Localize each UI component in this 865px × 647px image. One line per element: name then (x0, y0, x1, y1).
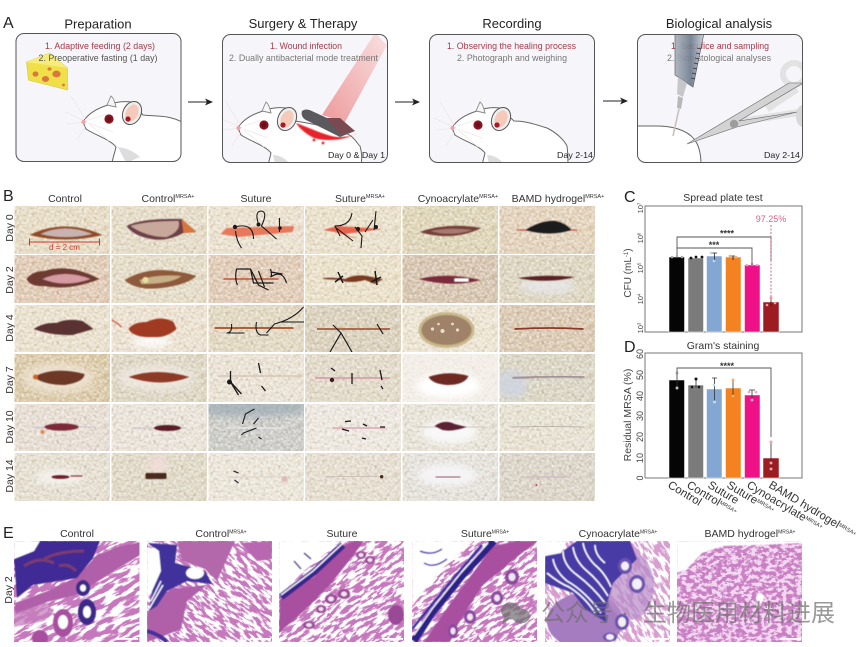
significance brackets (677, 237, 771, 265)
photo: control day 7 (14, 354, 110, 402)
panel letter D: D (624, 339, 636, 356)
photo: BAMD hydrogel day 14 (500, 453, 595, 501)
photo: BAMD hydrogel day 2 (500, 255, 595, 303)
tick labels: 50 (635, 370, 645, 380)
category labels: MRSA+ (718, 500, 738, 515)
text: analysis steps: 2. Biohistological analyses (667, 53, 771, 63)
axis label: Residual MRSA (%) (622, 369, 634, 461)
photo: cynoacrylate day 0 (402, 206, 498, 254)
panel: preparation (16, 33, 182, 162)
photo: control day 10 (14, 404, 110, 451)
category labels: Suture (724, 479, 760, 507)
row labels: days: Day 4 (4, 314, 16, 342)
photo: suture day 7 (208, 354, 304, 402)
axis label: -1 (624, 251, 630, 257)
icon: mouse (220, 102, 362, 168)
histology: cynoacrylate (545, 541, 671, 647)
chart: gram's staining (622, 340, 858, 541)
column headings: wound photos: MRSA+ (366, 194, 385, 200)
photo: cynoacrylate day 4 (402, 305, 498, 352)
column headings: histology: Control (60, 528, 94, 540)
tick labels: 20 (635, 432, 645, 442)
text: surgery steps (229, 41, 378, 63)
column headings: histology: MRSA+ (492, 530, 509, 536)
icon: syringe (673, 33, 704, 136)
tick labels: 30 (635, 411, 645, 421)
photo: suture MRSA day 14 (305, 453, 401, 501)
photo: cynoacrylate day 14 (402, 453, 498, 501)
histology: control (14, 541, 140, 642)
text: day label: Day 2-14 (557, 150, 593, 160)
column headings: wound photos: MRSA+ (175, 194, 194, 200)
chart: spread plate test: *** (709, 240, 720, 250)
column headings: histology: Cynoacrylate (579, 528, 640, 540)
category labels (665, 479, 858, 541)
text: preparation steps: 1. Adaptive feeding (2 days) (45, 41, 155, 51)
column headings: wound photos: Suture (335, 193, 366, 205)
photo: cynoacrylate day 7 (402, 354, 498, 402)
column headings: wound photos: BAMD hydrogel (512, 193, 585, 205)
chart: spread plate test: **** (720, 228, 734, 238)
panel letter E: E (3, 525, 14, 542)
row labels: days: Day 2 (4, 266, 16, 294)
photo: suture MRSA day 2 (305, 255, 401, 303)
category labels: Control (684, 479, 722, 509)
photo: BAMD hydrogel day 10 (500, 404, 595, 451)
column headings: wound photos: MRSA+ (479, 194, 498, 200)
text: recording steps: 2. Photograph and weighing (457, 53, 567, 63)
icon: laser beam (322, 33, 387, 122)
histology: suture (279, 541, 404, 642)
photo: suture day 2 (208, 255, 304, 303)
panel: recording (429, 34, 595, 163)
column headings: wound photos (48, 193, 604, 205)
photo: suture day 4 (208, 305, 304, 352)
tick labels: 10 (635, 453, 645, 463)
column headings: wound photos: Control (142, 193, 175, 205)
photo: suture day 10 (208, 404, 304, 451)
text: analysis steps: 1. Sacrifice and sampling (671, 41, 769, 51)
tick labels: 10 (636, 205, 645, 213)
tick labels: 0 (635, 475, 645, 481)
tick labels (635, 349, 645, 481)
tick labels: 6 (636, 232, 642, 235)
heading: Surgery & Therapy: Surgery & Therapy (249, 16, 358, 31)
tick labels: 40 (635, 391, 645, 401)
column headings: histology: BAMD hydrogel (705, 528, 778, 540)
text: day label: Day 0 & Day 1 (328, 150, 385, 160)
category labels: BAMD hydrogel (766, 479, 842, 531)
photo: suture MRSA day 10 (305, 404, 401, 451)
tick labels: 7 (636, 202, 642, 205)
photo: control MRSA day 0 (112, 206, 207, 254)
photo: control day 14 (14, 453, 110, 501)
row labels: days: Day 0 (4, 214, 16, 242)
arrow 1 (188, 98, 213, 106)
photo: suture MRSA day 4 (305, 305, 401, 352)
chart title: Spread plate test (683, 192, 763, 204)
histology: BAMD hydrogel (677, 541, 803, 642)
panel letter B: B (3, 188, 14, 205)
column headings: wound photos: Control (48, 193, 82, 205)
chart: spread plate test (623, 192, 802, 333)
tick labels: 10 (636, 265, 645, 273)
category labels: Cynoacrylate (744, 479, 808, 524)
error bars and data points (676, 372, 772, 472)
text: surgery steps: 2. Dually antibacterial mode treatment (229, 53, 378, 63)
row labels: days: Day 7 (4, 366, 16, 394)
column headings: histology: MRSA+ (640, 530, 657, 536)
icon: hydrogel device (302, 109, 355, 137)
panel: surgery and therapy (222, 34, 388, 163)
histology: suture MRSA (412, 541, 537, 642)
column headings: histology (60, 528, 796, 540)
chart: gram's staining: **** (720, 361, 734, 371)
column headings: histology: Suture (327, 528, 358, 540)
category labels: Control (665, 479, 703, 509)
column headings: wound photos: Cynoacrylate (418, 193, 479, 205)
text: analysis steps (667, 41, 771, 63)
column headings: histology: MRSA+ (778, 530, 796, 536)
axis label: CFU (mL (623, 257, 634, 298)
photo: control MRSA day 2 (112, 255, 207, 303)
photo: control MRSA day 10 (112, 404, 207, 451)
tick labels: 10 (636, 325, 645, 333)
photo: BAMD hydrogel day 7 (500, 354, 595, 402)
row labels: days: Day 10 (4, 410, 16, 444)
text: recording steps (447, 41, 576, 63)
row labels: days: Day 14 (4, 459, 16, 493)
data points (671, 252, 776, 306)
photo: control day 0: d = 2 cm (49, 243, 80, 252)
tick labels: 10 (636, 235, 645, 243)
watermark text: 生物医用材料进展 (643, 600, 835, 627)
photo: control day 2 (14, 255, 110, 303)
arrow 2 (395, 98, 420, 106)
category labels: MRSA+ (838, 522, 857, 537)
icon: tissue mound (635, 126, 701, 165)
column headings: histology: Suture (461, 528, 492, 540)
heading: Recording: Recording (482, 16, 542, 31)
photo: control MRSA day 14 (112, 453, 207, 501)
photo: control MRSA day 4 (112, 305, 207, 352)
text: preparation steps: 2. Preoperative fasting (1 day) (38, 53, 158, 63)
tick labels: 60 (635, 349, 645, 359)
row label: Day 2 (3, 576, 15, 604)
photo: control MRSA day 7 (112, 354, 207, 402)
panel letter C: C (624, 189, 636, 206)
arrow 3 (603, 98, 628, 104)
icon: blood on wound (296, 123, 357, 144)
photo: cynoacrylate day 2 (402, 255, 498, 303)
tick labels: 4 (636, 293, 642, 296)
heading: Preparation: Preparation (64, 16, 132, 32)
chart title: Gram's staining (687, 340, 759, 352)
photo: suture MRSA day 7 (305, 354, 401, 402)
category labels: MRSA+ (804, 516, 824, 531)
watermark text: · (621, 600, 629, 627)
text: day label: Day 2-14 (764, 150, 800, 160)
text: surgery steps: 1. Wound infection (270, 41, 342, 51)
text: recording steps: 1. Observing the healing process (447, 41, 576, 51)
watermark text: 公众号 (541, 600, 613, 627)
bars (669, 380, 779, 478)
row labels: days (4, 214, 16, 493)
axis label: ) (623, 248, 634, 252)
callout: 97.25%: 97.25% (756, 214, 786, 224)
photo: suture day 14 (208, 453, 304, 501)
text: preparation steps (38, 41, 158, 63)
tick labels (636, 202, 645, 333)
icon: mouse (65, 96, 182, 167)
category labels: MRSA+ (756, 498, 775, 513)
heading: Biological analysis: Biological analysis (666, 16, 773, 31)
photo: suture MRSA day 0 (305, 206, 401, 254)
histology: control MRSA (147, 541, 272, 642)
panel: biological analysis (637, 34, 803, 163)
column headings: histology: MRSA+ (229, 530, 247, 536)
photo: control day 0 (14, 206, 110, 254)
category labels: Suture (705, 479, 741, 507)
significance bracket (677, 368, 771, 437)
panel letter A: A (3, 15, 14, 32)
icon: scissors (687, 63, 810, 144)
column headings: wound photos: Suture (241, 193, 272, 205)
icon: cheese (26, 53, 68, 90)
tick labels: 3 (636, 322, 642, 325)
watermark icon (501, 602, 530, 624)
photo: control day 4 (14, 305, 110, 352)
photo: cynoacrylate day 10 (402, 404, 498, 451)
tick labels: 10 (636, 296, 645, 304)
photo: BAMD hydrogel day 0 (500, 206, 595, 254)
icon: mouse (434, 102, 568, 168)
column headings: wound photos: MRSA+ (585, 194, 604, 200)
tick labels: 5 (636, 262, 642, 265)
photo: BAMD hydrogel day 4 (500, 305, 595, 352)
bars (669, 256, 779, 332)
photo: suture day 0 (208, 206, 304, 254)
column headings: histology: Control (195, 528, 229, 540)
